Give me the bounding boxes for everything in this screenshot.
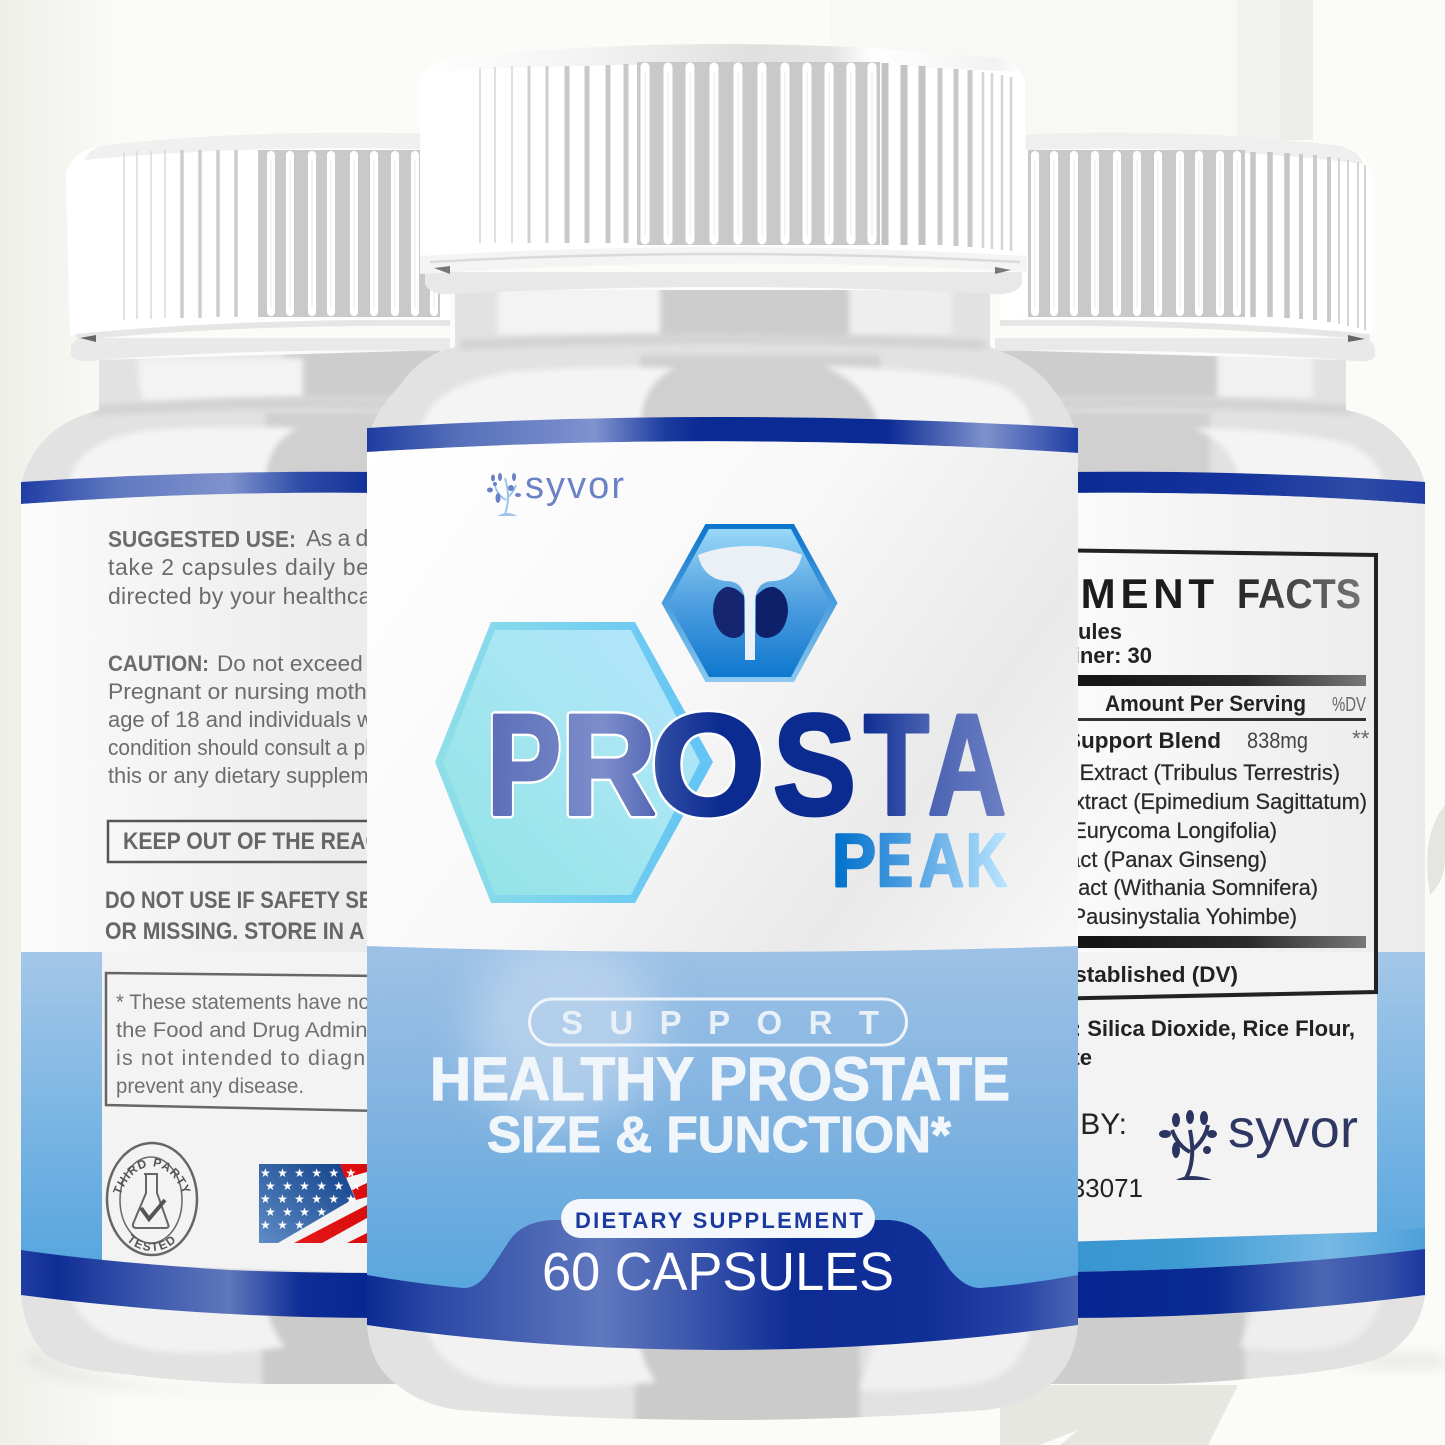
left bottle collar <box>71 338 450 361</box>
center label navy footer <box>367 1220 1078 1350</box>
keep out of reach box: KEEP OUT OF THE REACH OF CHILDREN <box>123 828 547 855</box>
center bottle collar <box>425 272 1022 294</box>
amount header: Amount Per Serving <box>1105 691 1306 716</box>
right label blue strip <box>1060 1228 1425 1272</box>
tree icon <box>487 473 521 516</box>
ingredients: Horny Goat Extract (Epimedium Sagittatum) <box>942 789 1367 814</box>
caution: Pregnant or nursing mothers, children under the <box>108 679 595 704</box>
support pill: SUPPORT <box>561 1004 879 1041</box>
PEAK wordmark: E <box>877 818 913 902</box>
thick rule <box>1040 675 1366 686</box>
PROSTA wordmark: A <box>928 686 1006 845</box>
safety warning <box>105 887 570 945</box>
center bottle body <box>360 280 1085 1430</box>
manufacturer: Coral Springs, FL 33071 <box>862 1173 1143 1203</box>
american flag: ★ ★ ★ ★ <box>265 1205 329 1219</box>
caution <box>108 651 595 788</box>
PROSTA wordmark: P <box>487 686 561 845</box>
right label navy footer <box>1060 1249 1425 1318</box>
other ingredients: Other Ingredients: Silica Dioxide, Rice Flour, <box>890 1016 1355 1041</box>
right bottle top band <box>1060 472 1425 504</box>
capsule count: 60 CAPSULES <box>542 1242 894 1302</box>
serving info: Servings Per Container: 30 <box>871 643 1152 668</box>
left label white <box>21 493 380 960</box>
left bottle cap <box>66 132 450 342</box>
blend row: ** <box>1352 726 1370 751</box>
american flag: ★ ★ ★ ★ ★ ★ <box>260 1192 358 1206</box>
suggested use: take 2 capsules daily before a meal or as <box>108 554 553 580</box>
disclaimer box: is not intended to diagnose, treat, cure or <box>116 1046 556 1070</box>
american flag: ★ ★ ★ ★ ★ ★ ★ <box>265 1179 380 1193</box>
headline: HEALTHY PROSTATE <box>430 1045 1010 1113</box>
PROSTA wordmark: O <box>651 686 765 845</box>
third party tested badge <box>106 1142 198 1256</box>
third party tested badge: THIRD PARTY <box>112 1158 191 1193</box>
PROSTA wordmark: S <box>773 686 856 845</box>
PEAK wordmark: K <box>966 818 1007 902</box>
dietary supplement pill <box>561 1199 875 1238</box>
PROSTA wordmark: O <box>651 686 765 845</box>
center top navy band <box>367 417 1078 453</box>
PEAK wordmark: P <box>832 818 876 902</box>
serving info: Serving Size: 2 Capsules <box>862 619 1122 644</box>
american flag: ★ ★ ★ <box>260 1218 306 1232</box>
center label blue <box>367 935 1078 1300</box>
dietary supplement pill: DIETARY SUPPLEMENT <box>575 1208 864 1233</box>
caution: Do not exceed recommended dose. <box>217 651 575 676</box>
american flag <box>259 1164 380 1243</box>
PROSTA wordmark: R <box>562 686 656 845</box>
safety warning: OR MISSING. STORE IN A COOL, DRY PLACE. <box>105 918 570 945</box>
center label white <box>367 441 1078 952</box>
PROSTA wordmark: T <box>864 686 929 845</box>
center bottle: front label <box>360 44 1085 1430</box>
PROSTA wordmark: P <box>487 686 561 845</box>
manufacturer: MANUFACTURED BY: <box>822 1108 1127 1141</box>
large hexagon <box>435 622 713 903</box>
prostate gland icon <box>698 546 802 660</box>
PROSTA wordmark <box>487 686 1006 845</box>
PEAK wordmark: A <box>919 818 964 902</box>
safety warning: DO NOT USE IF SAFETY SEAL IS DAMAGED <box>105 887 534 914</box>
right label white panel <box>1060 952 1377 1242</box>
syvor logo large <box>1159 1099 1358 1180</box>
ingredients: Yohimbe (Pausinystalia Yohimbe) <box>974 904 1297 929</box>
PROSTA wordmark: R <box>562 686 656 845</box>
syvor logo small: syvor <box>525 465 624 507</box>
third party tested badge: TESTED <box>128 1234 174 1251</box>
right label blue <box>1377 952 1425 1258</box>
disclaimer box: prevent any disease. <box>116 1074 304 1098</box>
suggested use: directed by your healthcare professional. <box>108 583 533 609</box>
headline <box>430 1045 1010 1163</box>
ingredients: Tribulus Extract (Tribulus Terrestris) <box>997 760 1340 785</box>
ingredients: Tongkat Ali (Eurycoma Longifolia) <box>954 818 1277 843</box>
suggested use: SUGGESTED USE: <box>108 526 296 552</box>
daily value note: **Daily Value Not Established (DV) <box>873 962 1238 987</box>
right bottle: supplement facts <box>995 132 1425 1384</box>
blend row: 838mg <box>1247 728 1308 753</box>
disclaimer box: * These statements have not been evaluated by <box>116 990 548 1014</box>
right label white <box>1060 493 1425 960</box>
subheadline: SIZE & FUNCTION* <box>487 1106 951 1163</box>
PEAK wordmark <box>832 818 1007 902</box>
caution: this or any dietary supplement. <box>108 763 405 788</box>
ingredients: Ginseng Extract (Panax Ginseng) <box>942 847 1267 872</box>
supplement facts box: SUPPLEMENT <box>884 570 1214 617</box>
left bottle top band <box>21 472 380 504</box>
disclaimer box <box>106 973 578 1111</box>
manufacturer <box>822 1108 1143 1203</box>
ingredients <box>895 760 1367 929</box>
left label white panel <box>102 952 380 1273</box>
serving info <box>862 619 1152 668</box>
other ingredients <box>791 1016 1355 1070</box>
support pill <box>530 999 906 1045</box>
supplement facts box <box>862 550 1376 999</box>
syvor logo small <box>487 465 624 516</box>
suggested use: As a dietary supplement, <box>306 525 546 551</box>
left bottle body <box>21 350 440 1384</box>
right bottle collar <box>995 338 1375 361</box>
left label navy footer <box>21 1250 380 1318</box>
small hexagon with gland icon <box>662 524 838 682</box>
blend row: Prostate Support Blend <box>970 728 1221 753</box>
syvor logo large: syvor <box>1228 1099 1358 1159</box>
suggested use <box>108 525 553 609</box>
left bottle: back label <box>21 132 595 1384</box>
american flag: ★ ★ ★ ★ ★ ★ <box>260 1166 358 1180</box>
blend row <box>970 726 1370 753</box>
left label blue <box>21 952 102 1265</box>
disclaimer box: the Food and Drug Administration. This product <box>116 1018 578 1042</box>
caution: age of 18 and individuals with a known medical <box>108 707 566 732</box>
center bottle cap <box>420 44 1027 274</box>
right bottle body <box>990 340 1445 1400</box>
caution: CAUTION: <box>108 651 209 676</box>
right bottle cap <box>1000 132 1372 342</box>
supplement facts box: FACTS <box>1237 570 1361 617</box>
keep out of reach box <box>108 821 547 862</box>
other ingredients: Gelatin, Magnesium Stearate <box>791 1045 1092 1070</box>
amount header: %DV <box>1332 694 1366 716</box>
ingredients: Ashwagandha Extract (Withania Somnifera) <box>895 875 1318 900</box>
caution: condition should consult a physician before using <box>108 735 561 760</box>
